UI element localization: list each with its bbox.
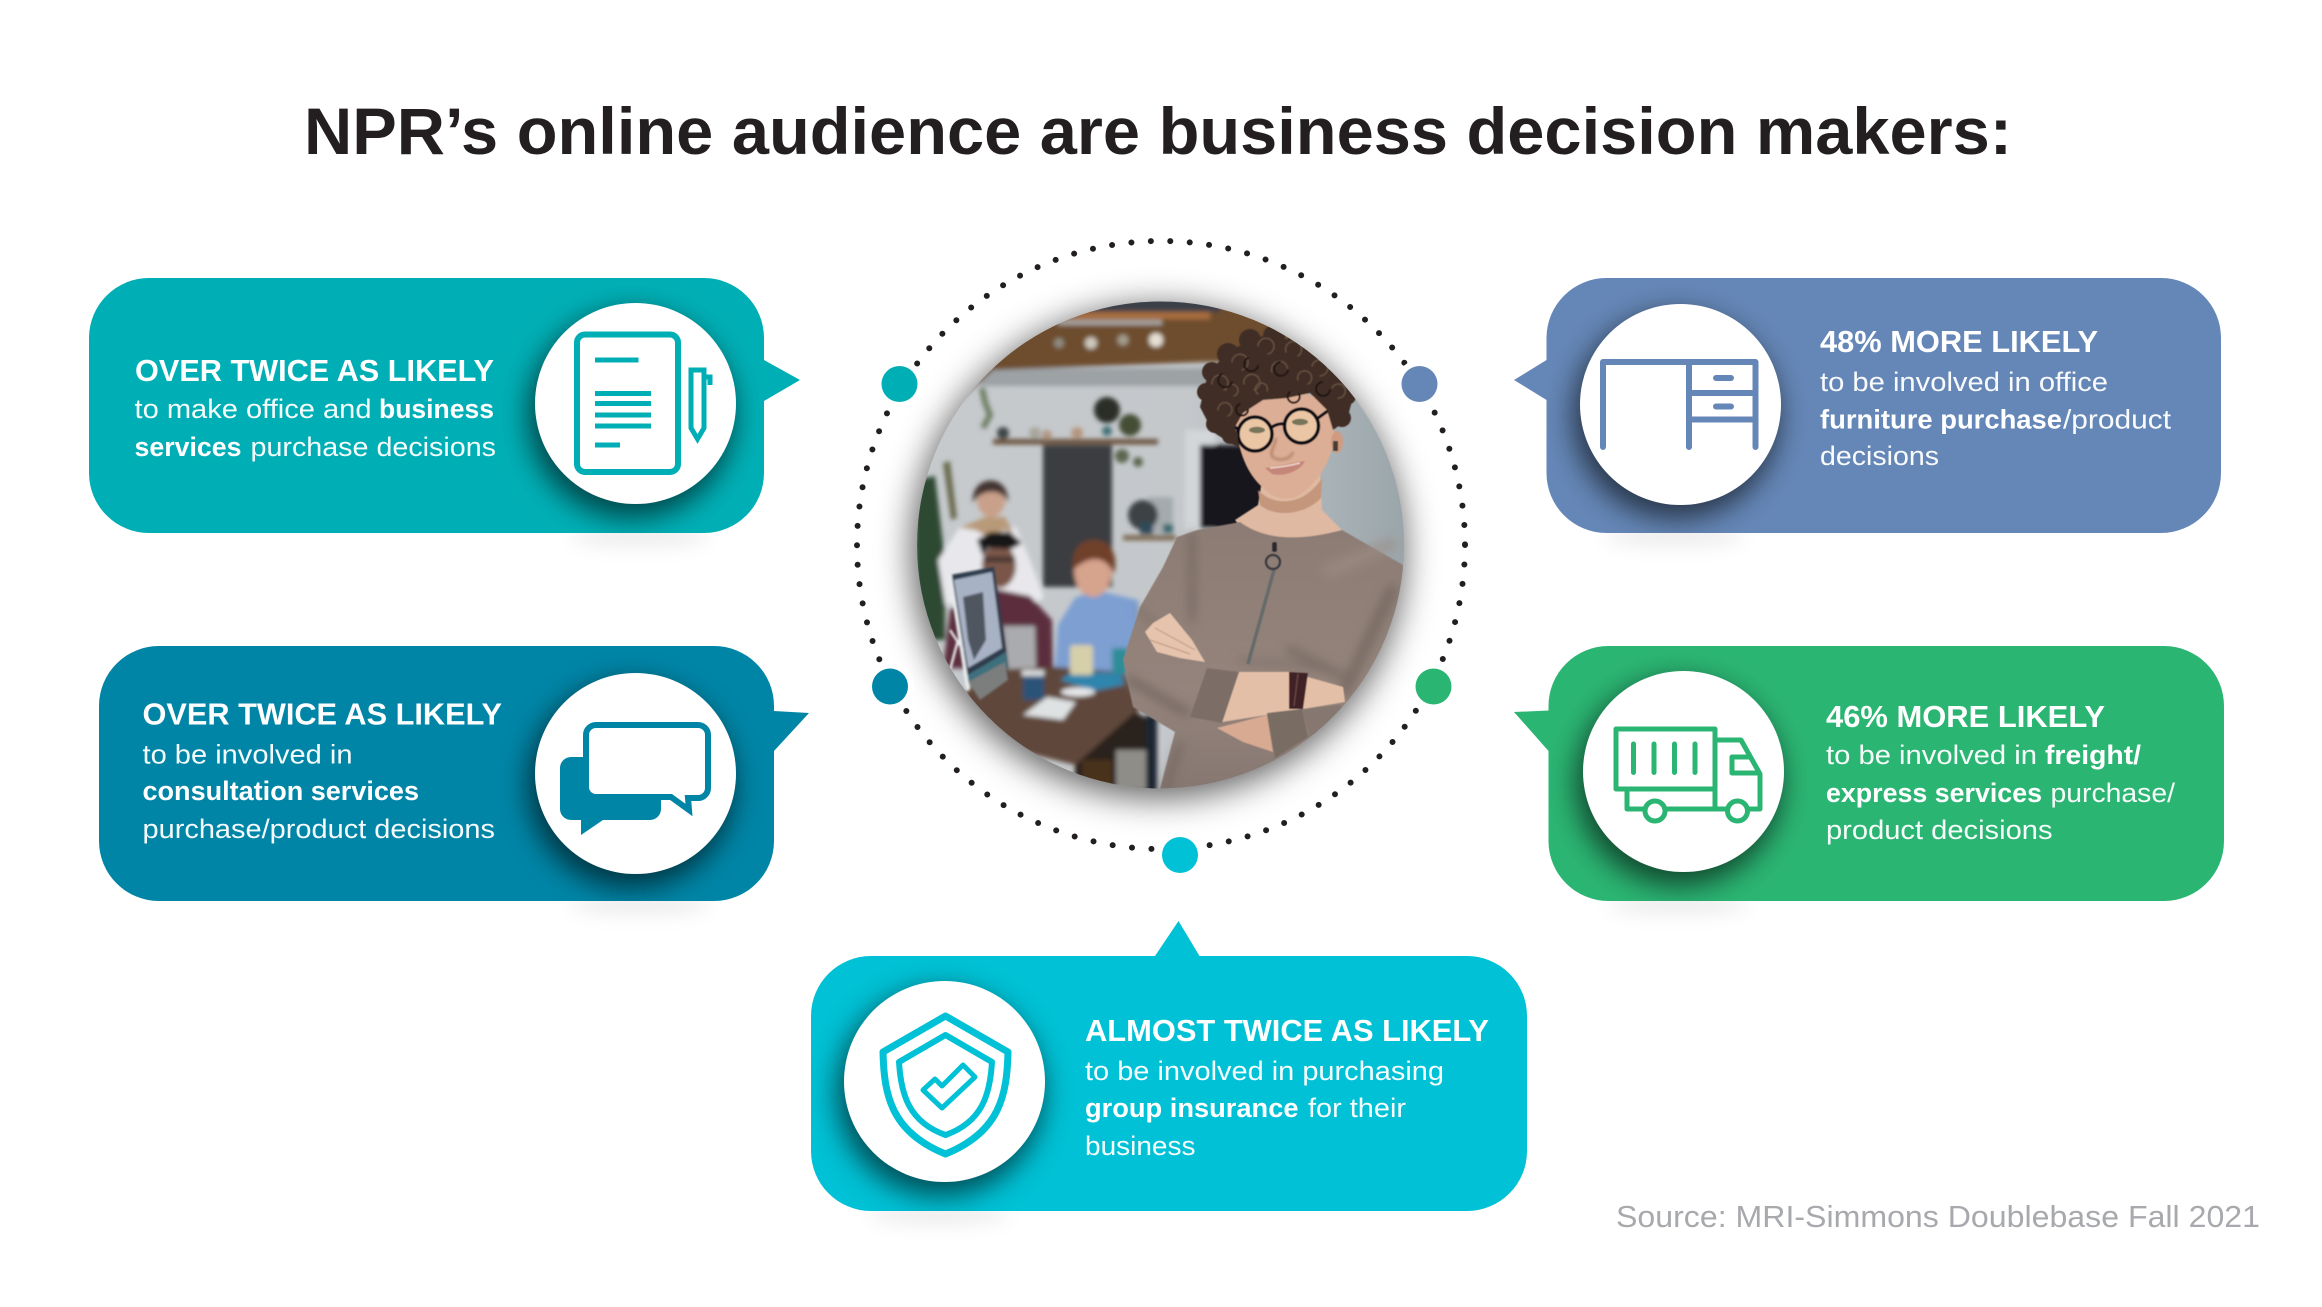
callout text: 46% MORE LIKELY xyxy=(1826,699,2105,734)
marker dot: teal xyxy=(876,360,924,408)
photo drop shadow xyxy=(912,306,1404,798)
zipper xyxy=(1248,570,1274,664)
callout text: to be involved in xyxy=(142,740,352,770)
callout text: express services xyxy=(1826,778,2042,808)
panel: office and business services xyxy=(89,278,800,547)
callout text: to make office and xyxy=(134,394,372,424)
callout text: to be involved in xyxy=(1826,740,2037,770)
callout text: /product xyxy=(2063,404,2172,434)
callout text: purchase/ xyxy=(2050,778,2176,808)
callout text: purchase/product decisions xyxy=(142,814,495,844)
callout text: for their xyxy=(1308,1093,1406,1123)
callout text: OVER TWICE AS LIKELY xyxy=(135,353,494,388)
callout text: 48% MORE LIKELY xyxy=(1820,324,2098,359)
icon: chat bubbles xyxy=(560,725,708,835)
speech bubble xyxy=(811,921,1527,1211)
panel: group insurance xyxy=(811,921,1527,1225)
callout text: services xyxy=(134,432,242,462)
photo: businesswoman with team in office xyxy=(910,295,1415,800)
face xyxy=(1236,392,1334,499)
callout text: business xyxy=(1085,1131,1196,1161)
panel: central photo with dotted ring xyxy=(857,241,1465,879)
marker dot: blue xyxy=(1396,360,1444,408)
callout text: product decisions xyxy=(1826,815,2052,845)
source note: Source: MRI-Simmons Doublebase Fall 2021 xyxy=(1616,1199,2260,1234)
panel: freight and express services xyxy=(1514,646,2224,915)
speech bubble xyxy=(1514,646,2224,901)
callout text: OVER TWICE AS LIKELY xyxy=(142,696,502,732)
callout text xyxy=(1826,699,2176,845)
icon: shield with check mark xyxy=(883,1016,1008,1154)
callout text: freight/ xyxy=(2045,740,2142,770)
panel: office furniture xyxy=(1514,278,2221,547)
speech bubble xyxy=(89,278,800,533)
callout text: purchase decisions xyxy=(250,432,496,462)
title: NPR’s online audience are business decision makers: xyxy=(304,94,2012,168)
marker dot: green xyxy=(1410,662,1458,710)
callout text xyxy=(1820,324,2172,471)
callout text: decisions xyxy=(1820,441,1939,471)
woman xyxy=(1123,325,1412,800)
callout text: business xyxy=(379,394,494,424)
callout text xyxy=(142,696,502,844)
curly hair xyxy=(1197,325,1356,448)
callout text xyxy=(134,353,496,462)
callout text xyxy=(1085,1013,1489,1161)
callout text: to be involved in purchasing xyxy=(1085,1056,1444,1086)
dotted ring xyxy=(857,241,1465,849)
marker dot: dark teal xyxy=(866,662,914,710)
callout text: ALMOST TWICE AS LIKELY xyxy=(1085,1013,1489,1048)
icon: desk xyxy=(1603,362,1756,447)
callout text: consultation services xyxy=(142,776,419,806)
glasses xyxy=(1238,417,1272,451)
icon: document and pen xyxy=(577,334,710,472)
icon: delivery truck xyxy=(1616,729,1760,821)
speech bubble xyxy=(99,646,809,901)
speech bubble xyxy=(1514,278,2221,533)
hands and forearms xyxy=(1145,613,1205,662)
callout text: furniture purchase xyxy=(1820,404,2062,434)
callout text: to be involved in office xyxy=(1820,367,2108,397)
panel: consultation services xyxy=(99,646,809,915)
marker dot: cyan xyxy=(1156,831,1204,879)
callout text: group insurance xyxy=(1085,1093,1298,1123)
